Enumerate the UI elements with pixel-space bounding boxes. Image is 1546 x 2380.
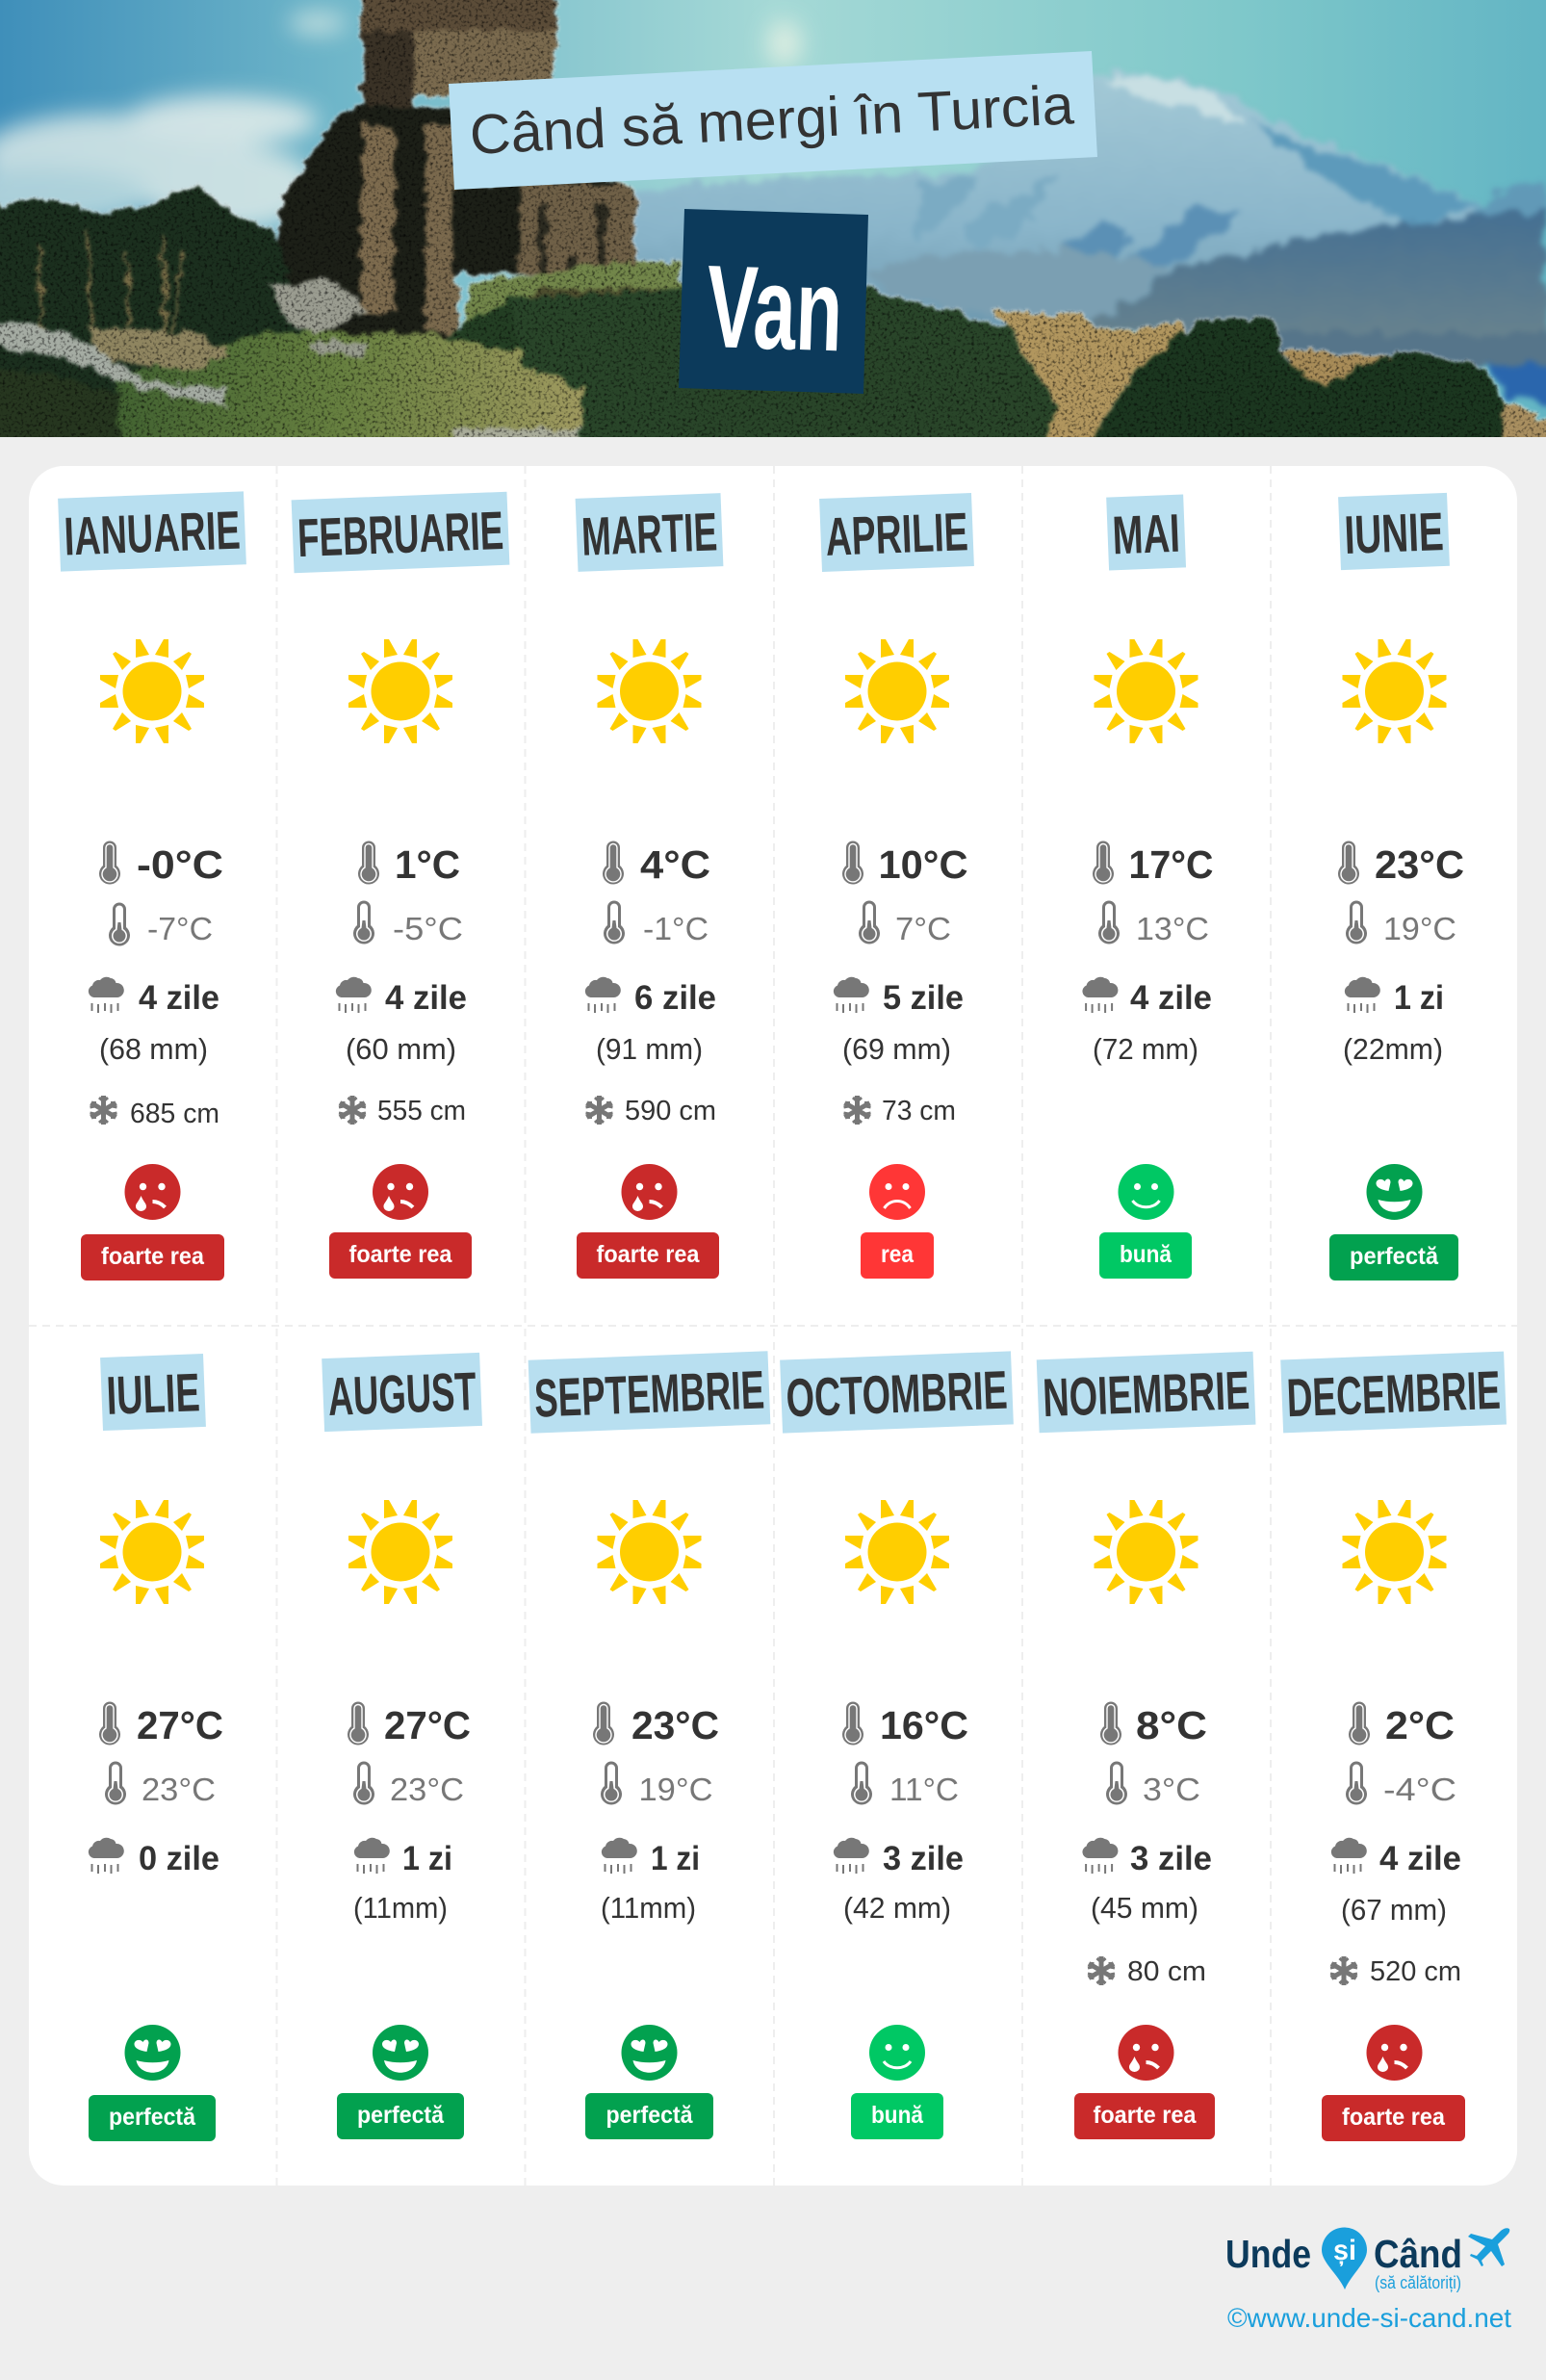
rain days: 6 zile — [634, 979, 716, 1017]
max temperature: 23°C — [1375, 842, 1464, 887]
min temperature: 23°C — [390, 1772, 464, 1807]
rating badge — [861, 1232, 934, 1279]
rain days — [1082, 1838, 1212, 1877]
rain days: 1 zi — [402, 1840, 452, 1877]
month panel: Mai — [1082, 494, 1213, 1279]
rating face — [869, 1164, 925, 1220]
month panel: Octombrie — [780, 1351, 1014, 2139]
min temperature: -5°C — [393, 911, 463, 946]
snowfall: 685 cm — [130, 1099, 219, 1129]
month heading: NOIEMBRIE — [1042, 1359, 1250, 1428]
logo: Unde și Când: (să călătoriți) — [1375, 2273, 1461, 2292]
min temperature — [105, 1762, 216, 1807]
month heading: MARTIE — [580, 501, 718, 567]
min temperature: 7°C — [895, 911, 951, 946]
month heading: IANUARIE — [63, 500, 242, 566]
max temperature: -0°C — [137, 842, 223, 887]
max temperature — [1100, 1702, 1207, 1747]
month panel: Decembrie — [1280, 1352, 1507, 2141]
rating badge — [337, 2093, 464, 2139]
max temperature — [593, 1702, 719, 1747]
rain days — [1082, 977, 1212, 1017]
min temperature: -7°C — [147, 911, 213, 946]
month panel: Martie — [576, 493, 723, 1279]
rain days — [1345, 977, 1444, 1017]
rain days — [354, 1838, 452, 1877]
min temperature — [601, 1762, 712, 1807]
month panel: August — [322, 1353, 482, 2139]
rating face — [1119, 1164, 1174, 1220]
rain days: 1 zi — [1394, 979, 1444, 1017]
min temperature: 19°C — [639, 1772, 712, 1807]
min temperature: 11°C — [889, 1772, 959, 1807]
rain days: 4 zile — [139, 979, 219, 1017]
max temperature: 8°C — [1136, 1703, 1207, 1747]
min temperature — [859, 901, 951, 946]
rain days: 1 zi — [651, 1840, 700, 1877]
logo: Unde și Când: și — [1333, 2235, 1356, 2266]
month heading: OCTOMBRIE — [785, 1359, 1009, 1428]
max temperature: 2°C — [1385, 1703, 1455, 1747]
rating face — [373, 1164, 428, 1220]
hero photo: church and mountain at Lake Van — [0, 0, 1546, 453]
rain days: 3 zile — [1130, 1840, 1212, 1877]
city label: Van: Van — [705, 241, 844, 375]
icon: sun — [845, 1500, 949, 1604]
month panel: Noiembrie — [1037, 1352, 1255, 2139]
month heading — [1106, 494, 1186, 571]
month heading: SEPTEMBRIE — [533, 1358, 765, 1429]
city label: Van — [679, 209, 868, 394]
snowfall — [1330, 1956, 1461, 1987]
rain days: 0 zile — [139, 1840, 219, 1877]
rain days — [1331, 1838, 1461, 1877]
rating badge — [81, 1234, 224, 1281]
rating face — [125, 1164, 181, 1220]
min temperature — [353, 1762, 464, 1807]
rating face — [1367, 2025, 1423, 2081]
min temperature — [1106, 1762, 1200, 1807]
month heading — [780, 1351, 1014, 1434]
rainfall: (69 mm) — [842, 1032, 951, 1066]
max temperature — [99, 1702, 223, 1747]
snowfall — [90, 1096, 219, 1129]
month heading: IULIE — [105, 1361, 201, 1426]
snowfall: 555 cm — [377, 1096, 466, 1126]
month heading — [819, 493, 974, 572]
rating badge: bună — [1120, 1241, 1172, 1268]
rainfall: (11mm) — [601, 1891, 696, 1925]
min temperature — [353, 901, 463, 946]
month heading — [322, 1353, 482, 1432]
logo: Unde și Când: Unde — [1225, 2232, 1311, 2276]
icon: sun — [597, 1500, 701, 1604]
snowfall — [843, 1096, 956, 1126]
month panel: Iunie — [1329, 493, 1464, 1281]
month panel: Septembrie — [528, 1351, 770, 2139]
rain days — [602, 1838, 700, 1877]
icon: sun — [1342, 639, 1446, 743]
max temperature — [1338, 841, 1464, 887]
month heading: FEBRUARIE — [296, 500, 504, 568]
rain days — [834, 1838, 964, 1877]
min temperature: -1°C — [643, 911, 709, 946]
rating badge: bună — [871, 2102, 924, 2129]
rainfall: (22mm) — [1343, 1032, 1443, 1066]
rainfall: (91 mm) — [596, 1032, 703, 1066]
max temperature — [358, 841, 460, 887]
max temperature: 23°C — [631, 1703, 719, 1747]
rainfall: (72 mm) — [1093, 1032, 1198, 1066]
rating badge: foarte rea — [1342, 2104, 1446, 2131]
website credit: ©www.unde-si-cand.net — [1227, 2303, 1511, 2333]
max temperature — [842, 1702, 968, 1747]
rain days: 5 zile — [883, 979, 964, 1017]
rainfall: (42 mm) — [843, 1891, 951, 1925]
rating face — [1119, 2025, 1174, 2081]
icon: sun — [100, 1500, 204, 1604]
month heading: AUGUST — [327, 1360, 477, 1427]
month heading — [100, 1354, 206, 1431]
title banner: Când să mergi în Turcia: Când să mergi în Turcia — [468, 73, 1076, 167]
rain days: 4 zile — [1130, 979, 1212, 1017]
min temperature: 23°C — [142, 1772, 216, 1807]
icon: sun — [845, 639, 949, 743]
min temperature: -4°C — [1383, 1772, 1456, 1807]
min temperature — [851, 1762, 959, 1807]
month panel: Ianuarie — [58, 491, 246, 1281]
rain days — [89, 977, 219, 1017]
snowfall: 73 cm — [882, 1096, 956, 1126]
rating badge: foarte rea — [1094, 2102, 1198, 2129]
rating badge: perfectă — [109, 2104, 196, 2131]
rainfall: (67 mm) — [1341, 1893, 1447, 1927]
rating badge — [1322, 2095, 1465, 2141]
max temperature — [1093, 841, 1213, 887]
rainfall: (45 mm) — [1091, 1891, 1198, 1925]
max temperature — [99, 841, 223, 887]
snowfall: 80 cm — [1127, 1956, 1206, 1987]
month heading — [1338, 493, 1450, 570]
rating badge — [89, 2095, 216, 2141]
rating badge — [585, 2093, 713, 2139]
month heading — [528, 1351, 770, 1434]
rating face — [373, 2025, 428, 2081]
min temperature — [109, 903, 213, 946]
rating face — [622, 2025, 678, 2081]
month panel: Iulie — [89, 1354, 223, 2141]
month heading — [58, 491, 246, 572]
month heading: APRILIE — [824, 501, 969, 567]
rating badge — [1099, 1232, 1192, 1279]
icon: sun — [100, 639, 204, 743]
max temperature — [348, 1702, 471, 1747]
min temperature: 3°C — [1143, 1772, 1200, 1807]
month panel: Februarie — [292, 492, 509, 1279]
rain days: 4 zile — [1379, 1840, 1461, 1877]
rating badge — [1074, 2093, 1215, 2139]
min temperature — [1098, 901, 1209, 946]
month heading: IUNIE — [1343, 501, 1445, 565]
rating badge — [329, 1232, 472, 1279]
rain days — [834, 977, 964, 1017]
month heading — [292, 492, 509, 573]
rainfall: (11mm) — [353, 1891, 448, 1925]
icon: sun — [348, 639, 452, 743]
month heading — [576, 493, 723, 572]
rain days — [89, 1838, 219, 1877]
icon: sun — [1094, 1500, 1198, 1604]
rainfall: (60 mm) — [346, 1032, 456, 1066]
rating face — [125, 2025, 181, 2081]
rating badge — [577, 1232, 719, 1279]
logo: Unde și Când — [1225, 2228, 1509, 2292]
max temperature — [842, 841, 968, 887]
max temperature: 17°C — [1128, 842, 1213, 887]
logo: Unde și Când: Când — [1374, 2232, 1462, 2276]
max temperature: 4°C — [640, 842, 710, 887]
month panel: Aprilie — [819, 493, 974, 1279]
rain days: 4 zile — [385, 979, 467, 1017]
max temperature: 1°C — [395, 842, 460, 887]
rainfall: (68 mm) — [99, 1032, 208, 1066]
rating badge: rea — [881, 1241, 915, 1268]
rating badge: perfectă — [1350, 1243, 1439, 1270]
rating face — [1367, 1164, 1423, 1220]
min temperature: 13°C — [1136, 911, 1209, 946]
max temperature: 27°C — [137, 1703, 223, 1747]
min temperature — [604, 901, 709, 946]
max temperature — [1349, 1702, 1455, 1747]
icon: sun — [348, 1500, 452, 1604]
max temperature — [603, 841, 710, 887]
max temperature: 27°C — [384, 1703, 471, 1747]
title banner: Când să mergi în Turcia — [449, 51, 1097, 190]
rain days: 3 zile — [883, 1840, 964, 1877]
snowfall — [339, 1096, 466, 1126]
rating badge: perfectă — [606, 2102, 694, 2129]
rain days — [336, 977, 467, 1017]
snowfall: 590 cm — [625, 1096, 716, 1126]
rating badge: perfectă — [357, 2102, 445, 2129]
icon: sun — [597, 639, 701, 743]
max temperature: 10°C — [878, 842, 968, 887]
min temperature — [1346, 901, 1456, 946]
rating badge: foarte rea — [597, 1241, 701, 1268]
rating badge: foarte rea — [348, 1241, 453, 1268]
rating badge — [851, 2093, 943, 2139]
min temperature: 19°C — [1383, 911, 1456, 946]
snowfall: 520 cm — [1370, 1956, 1461, 1987]
min temperature — [1346, 1762, 1456, 1807]
month heading: MAI — [1111, 503, 1181, 565]
rating badge: foarte rea — [101, 1243, 205, 1270]
snowfall — [1088, 1956, 1206, 1987]
calendar card — [29, 466, 1517, 2186]
rating badge — [1329, 1234, 1458, 1281]
icon: sun — [1342, 1500, 1446, 1604]
icon: sun — [1094, 639, 1198, 743]
icon: plane — [1468, 2228, 1509, 2266]
max temperature: 16°C — [880, 1703, 968, 1747]
rating face — [622, 1164, 678, 1220]
rating face — [869, 2025, 925, 2081]
month heading — [1037, 1352, 1255, 1433]
rain days — [585, 977, 716, 1017]
